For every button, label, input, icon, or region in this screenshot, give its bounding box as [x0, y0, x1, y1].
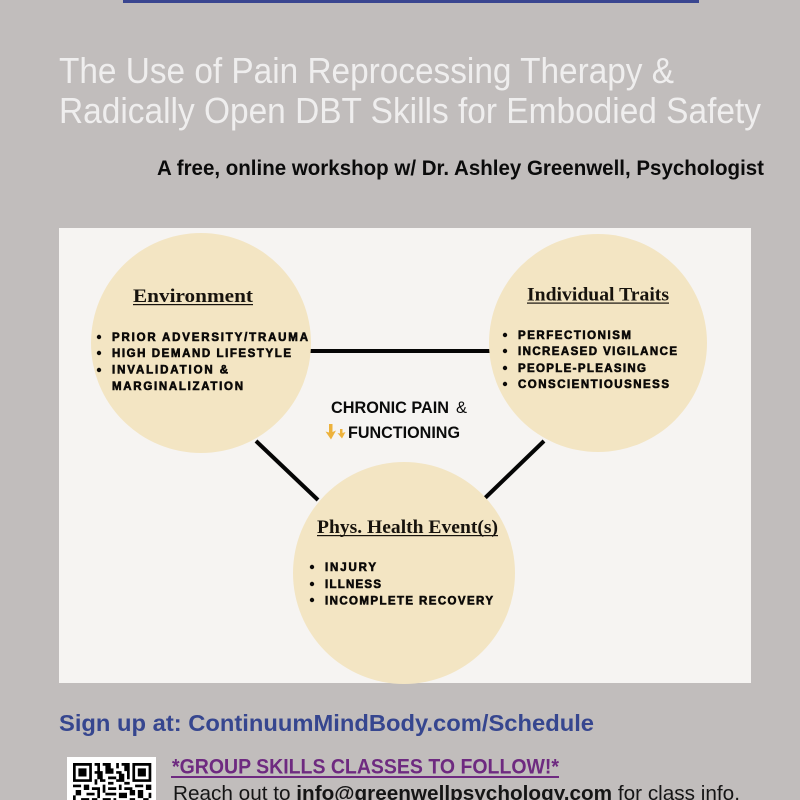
- title: [59, 50, 761, 131]
- subtitle: A free, online workshop w/ Dr. Ashley Greenwell, Psychologist: [157, 156, 764, 180]
- list: individual traits: PERFECTIONISM: [518, 330, 631, 342]
- sign up link: Sign up at: ContinuumMindBody.com/Schedule: [59, 710, 594, 736]
- list: environment: PRIOR ADVERSITY/TRAUMA: [112, 332, 308, 344]
- title: Radically Open DBT Skills for Embodied Safety: [59, 90, 761, 131]
- center label: CHRONIC PAIN: [331, 399, 449, 417]
- list: environment: MARGINALIZATION: [112, 381, 243, 393]
- heading: physical health events: Phys. Health Event(s): [317, 517, 498, 538]
- list: physical health events: INCOMPLETE RECOVERY: [325, 596, 493, 608]
- list: individual traits: INCREASED VIGILANCE: [518, 346, 677, 358]
- list: physical health events: [310, 562, 493, 608]
- center label: [326, 399, 467, 442]
- icon: down arrows: [326, 424, 346, 440]
- list: physical health events: ILLNESS: [325, 579, 381, 591]
- title: The Use of Pain Reprocessing Therapy &: [59, 50, 674, 91]
- circle: environment: [91, 233, 311, 453]
- connector lines: [256, 351, 544, 500]
- list: environment: INVALIDATION &: [112, 364, 228, 376]
- heading: individual traits: Individual Traits: [527, 284, 669, 306]
- list: individual traits: CONSCIENTIOUSNESS: [518, 379, 669, 391]
- group classes heading: *GROUP SKILLS CLASSES TO FOLLOW!*: [172, 754, 560, 778]
- list: environment: HIGH DEMAND LIFESTYLE: [112, 348, 291, 360]
- list: individual traits: [503, 330, 677, 391]
- center label: &: [456, 399, 467, 417]
- list: environment: [97, 332, 308, 393]
- list: physical health events: INJURY: [325, 562, 376, 574]
- QR code: [67, 757, 156, 800]
- list: individual traits: PEOPLE-PLEASING: [518, 363, 646, 375]
- circle: individual traits: [489, 234, 707, 452]
- panel: diagram: [59, 228, 751, 684]
- center label: FUNCTIONING: [348, 424, 460, 442]
- top blue bar: [123, 0, 699, 3]
- heading: environment: Environment: [133, 286, 254, 307]
- circle: physical health events: [293, 462, 515, 684]
